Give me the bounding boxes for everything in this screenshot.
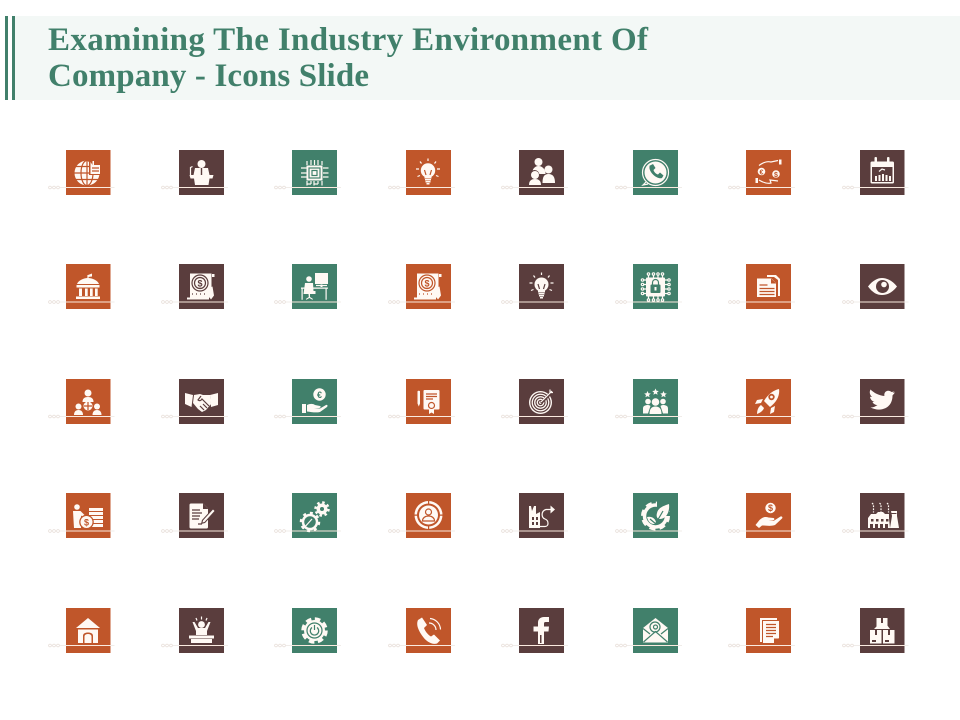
icon: cheering person xyxy=(189,616,214,643)
tile: gears xyxy=(275,493,341,538)
icon: calendar xyxy=(870,157,894,184)
icon: house xyxy=(76,618,100,643)
tile: dollar scan orange xyxy=(389,264,455,309)
icon: eco gear xyxy=(642,501,669,529)
icon: open envelope xyxy=(643,618,668,642)
icon: podium speaker xyxy=(190,160,214,185)
tile: twitter xyxy=(843,379,908,424)
tile: person at desk xyxy=(275,264,341,309)
icon: phone call xyxy=(417,618,440,644)
title xyxy=(48,22,649,94)
icon: chip with lock xyxy=(641,273,670,301)
tile: whatsapp xyxy=(616,150,682,195)
icon: bank xyxy=(76,274,100,299)
tile: gear power xyxy=(275,608,341,653)
icon: investor: $ xyxy=(84,517,89,527)
icon: people xyxy=(529,158,555,185)
icon: hands and coins: € xyxy=(760,170,764,176)
icon: gear xyxy=(303,619,326,642)
icon: team with stars xyxy=(643,388,668,414)
tile: secure chip xyxy=(616,264,682,309)
icon: factory with arrow xyxy=(529,506,555,528)
tile: home xyxy=(49,608,114,653)
icon: hands and coins xyxy=(756,160,782,183)
tile: documents xyxy=(729,264,795,309)
icon: target person xyxy=(414,500,443,530)
tile: handshake xyxy=(162,379,228,424)
tile: rocket xyxy=(729,379,795,424)
tile: cheering speaker xyxy=(162,608,228,653)
tile: calendar chart xyxy=(843,150,908,195)
tile: email xyxy=(616,608,682,653)
tile: eye xyxy=(843,264,908,309)
icon: eye xyxy=(868,278,897,295)
tile: target person xyxy=(389,493,455,538)
tile: person with coins xyxy=(49,493,114,538)
tile: power plant xyxy=(843,493,908,538)
icon: facebook logo xyxy=(534,617,549,644)
tile: circuit chip xyxy=(275,150,341,195)
tile: star team xyxy=(616,379,682,424)
tile: phone xyxy=(389,608,455,653)
icon: target xyxy=(529,390,554,414)
title: Examining The Industry Environment Of xyxy=(48,22,649,58)
icon: network xyxy=(74,390,102,415)
header band xyxy=(5,16,960,100)
icon: rocket xyxy=(755,389,779,414)
tile: dollar scan brown xyxy=(162,264,228,309)
tile: people network xyxy=(49,379,114,424)
icon: stacked document xyxy=(760,618,779,644)
icon: power plant xyxy=(868,503,899,528)
icon: dollar under magnifier: $ xyxy=(197,278,203,288)
icon: handshake xyxy=(185,393,218,412)
icon: euro hand: € xyxy=(317,390,322,400)
tile: gear with leaf xyxy=(616,493,682,538)
tile: light bulb orange xyxy=(389,150,455,195)
icon: gears and wrench xyxy=(301,502,328,531)
icon: whatsapp xyxy=(642,160,668,186)
icon: certificate xyxy=(418,390,440,414)
tile: speaker at podium xyxy=(162,150,228,195)
icon: bulb xyxy=(416,158,440,184)
tile: facebook xyxy=(502,608,568,653)
icon: twitter bird xyxy=(870,390,895,410)
tile: light bulb brown xyxy=(502,264,568,309)
tile: bank xyxy=(49,264,114,309)
icon: hands and coins: $ xyxy=(774,172,778,179)
icon: document pen xyxy=(190,504,216,528)
tile: globe and factory xyxy=(49,150,114,195)
tile: euro in hand xyxy=(275,379,341,424)
tile: document and pen xyxy=(162,493,228,538)
icon: bulb xyxy=(530,272,554,298)
title: Company - Icons Slide xyxy=(48,58,369,94)
icon: documents xyxy=(757,275,780,297)
tile: document xyxy=(729,608,795,653)
tile: certificate xyxy=(389,379,455,424)
icon: dollar hand: $ xyxy=(768,503,773,513)
tile: target xyxy=(502,379,568,424)
icon: globe xyxy=(74,159,102,186)
tile: factory route xyxy=(502,493,568,538)
icon: desk worker xyxy=(301,273,328,300)
tile: boxes xyxy=(843,608,908,653)
tile: people group xyxy=(502,150,568,195)
tile: coin in hand xyxy=(729,493,795,538)
icon: stacked boxes xyxy=(870,618,894,644)
icon: chip xyxy=(301,160,328,186)
tile: hands exchanging coins xyxy=(729,150,795,195)
icon: dollar under magnifier: $ xyxy=(424,278,430,288)
